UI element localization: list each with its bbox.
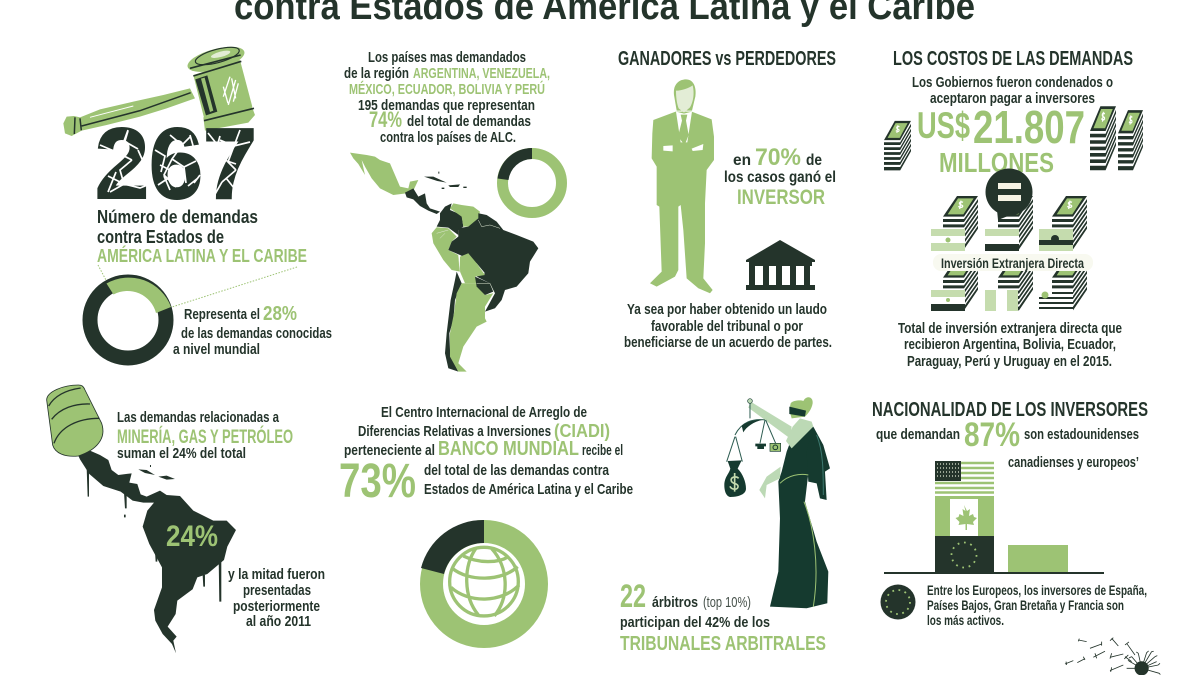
illustration: lady justice: [724, 397, 830, 608]
illustration: oil spill map: [47, 385, 236, 653]
text: explanation: Ya sea por haber obtenido un laudo: [627, 301, 827, 318]
text: total investment: Total de inversión extranjera directa que: [898, 320, 1122, 337]
text: 22 arbitrators: (top 10%): [703, 594, 751, 611]
text: number of claims: contra Estados de: [97, 227, 224, 247]
text: CIADI: Estados de América Latina y el Caribe: [424, 481, 633, 498]
label: foreign direct investment: Inversión Extranjera Directa: [941, 256, 1084, 271]
text: 87 percent: son estadounidenses: [1024, 426, 1139, 443]
text: mining: Las demandas relacionadas a: [117, 409, 279, 426]
text: European investors: [927, 583, 1147, 628]
text: CIADI: 73%: [339, 455, 416, 508]
text: European investors: los más activos.: [927, 613, 1004, 628]
flag: Canada: [935, 496, 994, 536]
text: number of claims: [97, 207, 307, 266]
text: 87 percent: [876, 416, 1139, 471]
icon: bank building: [746, 240, 815, 290]
panel: cost of claims: [884, 48, 1143, 370]
amount: [917, 101, 1085, 178]
text: half after 2011: posteriormente: [233, 598, 320, 615]
text: half after 2011: al año 2011: [246, 613, 311, 630]
text: half after 2011: y la mitad fueron: [228, 566, 325, 583]
text: most sued countries: ARGENTINA, VENEZUELA,: [413, 65, 550, 82]
text: explanation: beneficiarse de un acuerdo de partes.: [624, 334, 832, 351]
text: 70 percent: 70%: [755, 144, 801, 171]
text: 87 percent: canadienses y europeos’: [1008, 454, 1139, 471]
text: 70 percent: de: [806, 152, 822, 169]
text: mining: [117, 409, 293, 462]
panel: mining oil gas: [47, 385, 325, 653]
icon: gavel: [63, 42, 255, 136]
text: total investment: [898, 320, 1122, 370]
text: CIADI: BANCO MUNDIAL: [438, 438, 579, 460]
text: 28 percent: [173, 303, 332, 358]
panel: investor nationality: [872, 399, 1160, 675]
text: European investors: Países Bajos, Gran Bretaña y Francia son: [927, 598, 1124, 613]
panel: CIADI: [339, 404, 633, 636]
text: 70 percent: los casos ganó el: [724, 169, 836, 186]
text: governments: [912, 74, 1113, 107]
icon: businessman: [650, 79, 714, 293]
bar chart: nationality: [884, 461, 1104, 574]
text: CIADI: del total de las demandas contra: [424, 462, 610, 479]
text: 28 percent: Representa el: [184, 306, 260, 323]
text: number of claims: Número de demandas: [97, 207, 258, 227]
text: explanation: favorable del tribunal o por: [651, 318, 803, 335]
heading: GANADORES vs PERDEDORES: [618, 48, 836, 70]
text: 28 percent: a nivel mundial: [173, 341, 260, 358]
text: most sued countries: contra los países de ALC.: [380, 129, 516, 146]
text: 70 percent: INVERSOR: [737, 186, 825, 209]
text: mining: MINERÍA, GAS Y PETRÓLEO: [117, 426, 293, 448]
text: most sued countries: 195 demandas que representan: [358, 97, 535, 114]
icon: World Bank globe: [450, 547, 519, 616]
text: CIADI: perteneciente al: [344, 442, 435, 459]
text: most sued countries: Los países mas demandados: [368, 49, 526, 66]
text: half after 2011: presentadas: [243, 582, 311, 599]
text: 70 percent: en: [733, 152, 751, 169]
text: 28 percent: de las demandas conocidas: [181, 325, 332, 342]
panel: most sued countries: [344, 49, 562, 372]
donut chart: 28%: [90, 278, 171, 358]
text: most sued countries: de la región: [344, 65, 409, 82]
text: 22 arbitrators: TRIBUNALES ARBITRALES: [620, 633, 826, 655]
text: 28 percent: 28%: [263, 303, 297, 325]
text: CIADI: [339, 404, 633, 508]
panel: arbitrators: [620, 397, 830, 655]
text: 22 arbitrators: participan del 42% de los: [620, 614, 770, 631]
number 267: 267: [95, 108, 257, 220]
text: number of claims: AMÉRICA LATINA Y EL CARIBE: [97, 245, 307, 266]
donut chart: 73%: [421, 520, 536, 636]
icon: money stacks: [884, 106, 1143, 170]
donut chart: 74%: [498, 148, 562, 212]
amount: US$: [917, 105, 970, 146]
icon: investment stacks with flags: [931, 196, 1087, 311]
text: CIADI: El Centro Internacional de Arreglo de: [381, 404, 587, 421]
panel: winners vs losers: [618, 48, 836, 351]
text: most sued countries: del total de demandas: [407, 113, 531, 130]
text: most sued countries: [344, 49, 550, 146]
text: half after 2011: [228, 566, 325, 630]
text: CIADI: recibe el: [582, 442, 623, 459]
flag: European Union: [935, 536, 994, 573]
text: 22 arbitrators: árbitros: [652, 594, 698, 611]
amount: MILLONES: [939, 147, 1054, 178]
text: 70 percent: [724, 144, 836, 209]
flag: United States: [935, 461, 994, 494]
text: governments: aceptaron pagar a inversores: [930, 90, 1095, 107]
text: governments: Los Gobiernos fueron condenados o: [912, 74, 1113, 91]
icon: EU circle: [880, 584, 916, 620]
icon: equals sign: [986, 168, 1032, 220]
text: CIADI: (CIADI): [554, 421, 610, 441]
text: total investment: Paraguay, Perú y Uruguay en el 2015.: [907, 353, 1112, 370]
text: CIADI: Diferencias Relativas a Inversiones: [358, 423, 551, 440]
map: Latin America: [350, 153, 538, 372]
text: total investment: recibieron Argentina, Bolivia, Ecuador,: [904, 336, 1116, 353]
dashed leaders: [98, 265, 297, 307]
text: most sued countries: 74%: [369, 107, 402, 132]
text: 22 arbitrators: 22: [620, 578, 646, 614]
text: 22 arbitrators: [620, 578, 826, 655]
text: explanation: [624, 301, 832, 351]
label: 24 percent: 24%: [166, 520, 218, 553]
baseline: [884, 572, 1104, 574]
text: 87 percent: que demandan: [876, 426, 960, 443]
text: 87 percent: 87%: [964, 416, 1020, 454]
amount: 21.807: [973, 101, 1085, 153]
text: most sued countries: MÉXICO, ECUADOR, BOLIVIA Y PERÚ: [349, 80, 545, 98]
bar: other: [1008, 545, 1068, 573]
text: mining: suman el 24% del total: [117, 445, 246, 462]
panel: number of claims: [63, 42, 332, 358]
icon: dandelion: [1065, 638, 1160, 675]
